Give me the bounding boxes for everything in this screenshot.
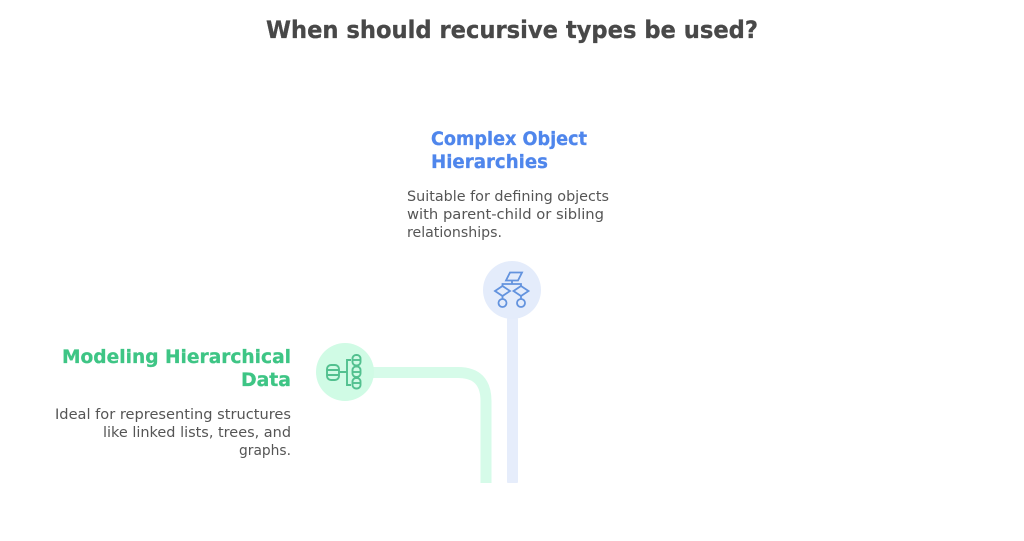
connector: blue stem — [507, 318, 518, 483]
heading: modeling hierarchical data: Modeling Hierarchical — [62, 346, 291, 368]
title: When should recursive types be used? — [266, 16, 758, 44]
connector: green curved stem — [372, 372, 486, 483]
text block: modeling description: like linked lists, trees, and — [103, 425, 291, 441]
heading: modeling hierarchical data: Data — [241, 369, 291, 391]
panel: complex object hierarchies — [407, 128, 609, 241]
text block: modeling description — [55, 407, 291, 459]
panel: modeling hierarchical data — [55, 346, 291, 459]
text block: complex object description — [407, 189, 609, 241]
icon: database tree — [316, 343, 374, 401]
icon: flowchart hierarchy — [483, 261, 541, 319]
text block: complex object description: Suitable for defining objects — [407, 189, 609, 205]
text block: complex object description: relationships. — [407, 225, 502, 241]
heading: complex object hierarchies: Hierarchies — [431, 151, 548, 173]
heading: complex object hierarchies — [431, 128, 587, 173]
heading: complex object hierarchies: Complex Object — [431, 128, 587, 150]
heading: modeling hierarchical data — [62, 346, 291, 391]
text block: complex object description: with parent-child or sibling — [407, 207, 604, 223]
text block: modeling description: Ideal for representing structures — [55, 407, 291, 423]
text block: modeling description: graphs. — [239, 443, 291, 459]
